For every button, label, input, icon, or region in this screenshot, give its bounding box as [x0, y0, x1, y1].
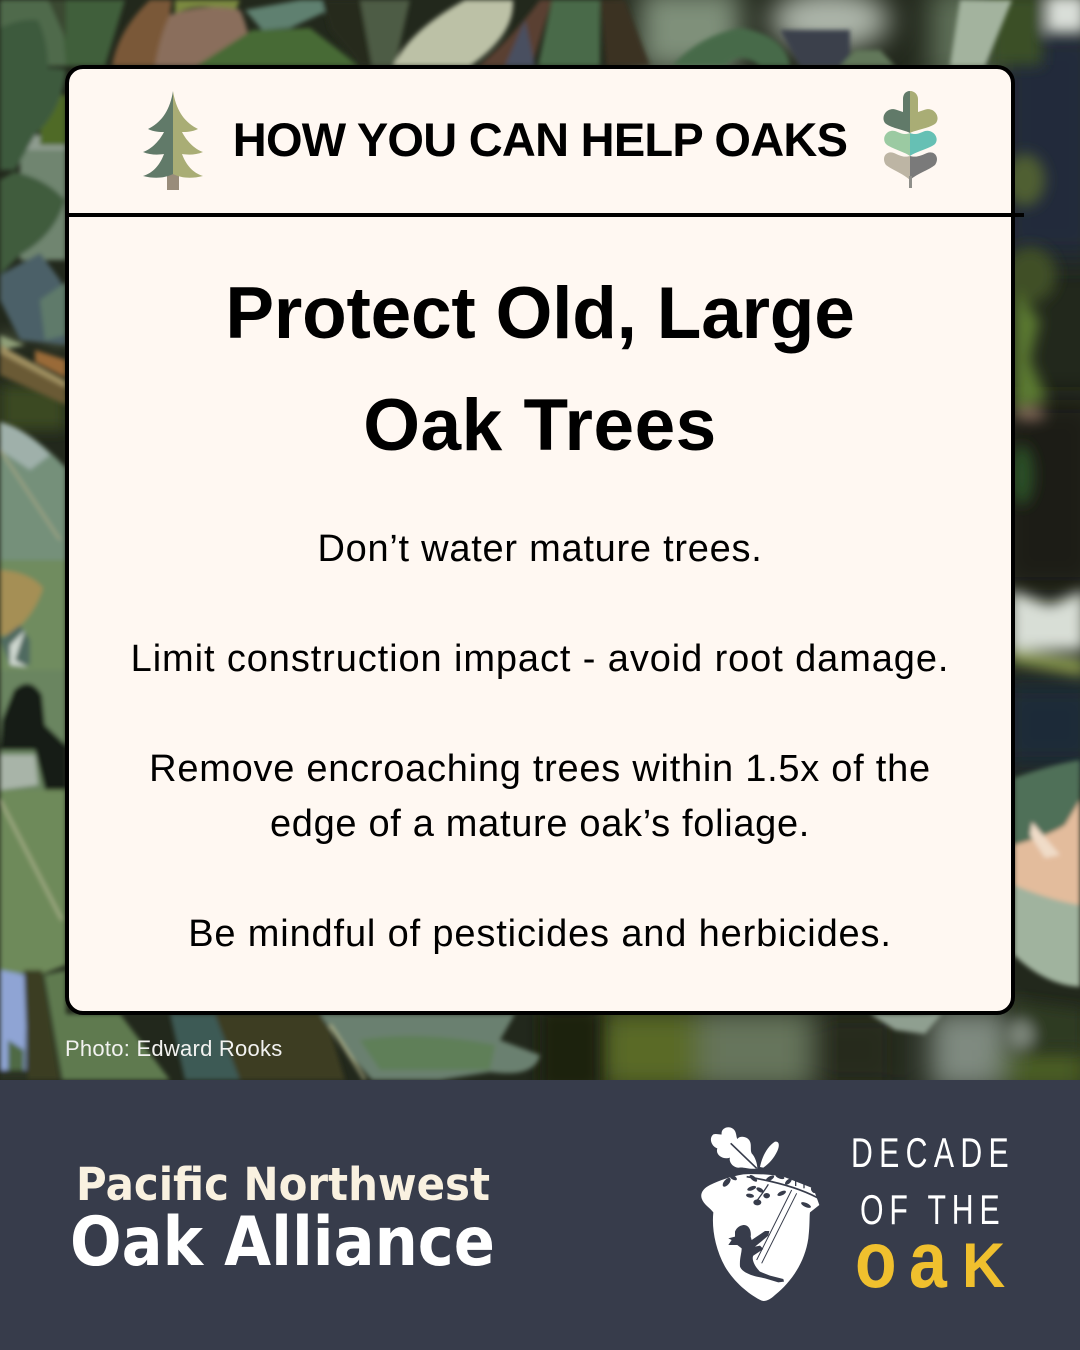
footer wordmark: Pacific Northwest Oak Alliance: Pacific Northwest — [76, 1158, 490, 1211]
panel: main card — [65, 65, 1015, 1015]
body text: Don’t water mature trees. — [317, 528, 763, 570]
icon: evergreen tree — [143, 91, 203, 190]
background photo: oak leaves — [0, 0, 1080, 1080]
footer wordmark: Pacific Northwest Oak Alliance — [70, 1158, 495, 1280]
logo text: Decade of the Oak — [851, 1129, 1009, 1300]
left column bottom — [0, 560, 66, 680]
body text: Remove encroaching trees within 1.5x of the — [149, 748, 931, 790]
body text: Limit construction impact - avoid root damage. — [131, 638, 949, 680]
bottom leaf — [320, 1014, 540, 1080]
footer band — [0, 1080, 1080, 1350]
left column top — [0, 0, 66, 66]
logo text: Decade of the Oak: DECADE — [851, 1129, 1009, 1176]
body text: Be mindful of pesticides and herbicides. — [188, 913, 892, 955]
logo text: Decade of the Oak: K — [962, 1231, 1005, 1300]
body text: edge of a mature oak’s foliage. — [270, 803, 810, 845]
heading — [225, 273, 855, 466]
right column leaf — [1014, 760, 1080, 860]
photo credit: Photo: Edward Rooks — [65, 1036, 283, 1061]
icon: oak leaf — [883, 91, 938, 188]
logo: acorn with swing silhouette — [701, 1127, 820, 1301]
top strip leaves — [0, 0, 50, 45]
header divider — [69, 213, 1024, 217]
logo text: Decade of the Oak: OF THE — [860, 1186, 1000, 1233]
title: HOW YOU CAN HELP OAKS — [233, 113, 847, 166]
heading: Protect Old, Large — [225, 273, 855, 354]
body text — [131, 528, 949, 955]
heading: Oak Trees — [363, 385, 717, 466]
